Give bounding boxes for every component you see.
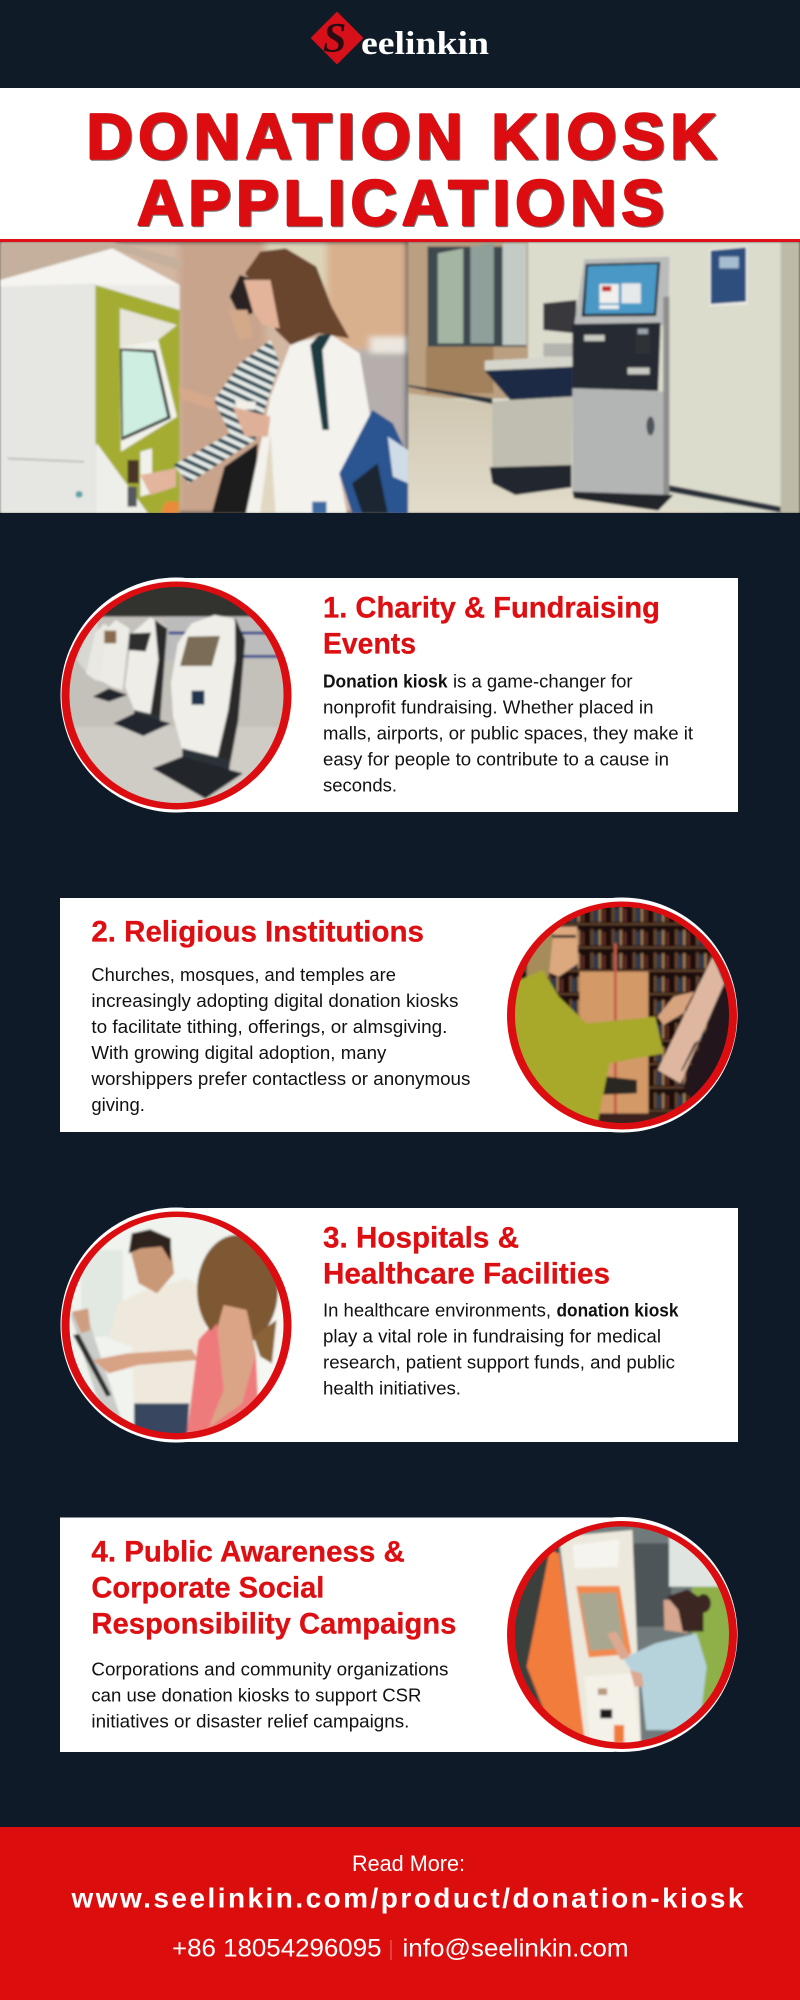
body text: is a game-changer for (453, 672, 632, 692)
heading: Responsibility Campaigns (91, 1608, 456, 1641)
contact details (172, 1935, 628, 1963)
photo banner (0, 242, 800, 513)
contact details: +86 18054296095 (172, 1935, 382, 1963)
heading: 3. Hospitals & (323, 1221, 519, 1254)
body text: giving. (91, 1095, 145, 1115)
body text: can use donation kiosks to support CSR (91, 1686, 421, 1706)
body text (90, 965, 470, 1115)
heading (323, 1221, 610, 1290)
contact details: info@seelinkin.com (402, 1935, 628, 1963)
body text: With growing digital adoption, many (91, 1043, 386, 1063)
title: APPLICATIONS (137, 167, 664, 239)
footer band (0, 1827, 800, 2000)
body text (91, 1660, 448, 1732)
heading: Corporate Social (91, 1572, 324, 1605)
website url: www.seelinkin.com/product/donation-kiosk (70, 1882, 744, 1913)
body text: play a vital role in fundraising for medical (323, 1327, 661, 1347)
body text: In healthcare environments, (323, 1301, 551, 1321)
heading: Healthcare Facilities (323, 1257, 610, 1290)
panel 2: Religious Institutions (60, 897, 743, 1133)
heading: 2. Religious Institutions (91, 916, 424, 949)
body text (323, 672, 693, 796)
body text: Donation kiosk (323, 672, 448, 692)
logo: Seelinkin: eelinkin (361, 26, 489, 62)
heading: Events (323, 627, 416, 660)
body text: initiatives or disaster relief campaigns. (91, 1712, 409, 1732)
body text: Corporations and community organizations (91, 1660, 448, 1680)
photo: women using green kiosk (0, 242, 408, 513)
panel 1: Charity & Fundraising Events (58, 577, 738, 813)
body text: to facilitate tithing, offerings, or almsgiving. (91, 1017, 447, 1037)
title band (0, 88, 800, 242)
heading (323, 591, 660, 660)
heading (91, 1536, 456, 1641)
header band with logo (0, 0, 800, 88)
logo: Seelinkin: S (323, 16, 346, 62)
body text: Churches, mosques, and temples are (91, 965, 396, 985)
body text: donation kiosk (556, 1301, 679, 1321)
circular photo 1: airport kiosks (58, 577, 297, 813)
read more label: Read More: (352, 1851, 465, 1876)
circular photo 2: woman at kiosk in library (504, 897, 743, 1133)
heading: 4. Public Awareness & (91, 1536, 405, 1569)
body text (323, 1301, 679, 1399)
heading: 1. Charity & Fundraising (323, 591, 660, 624)
photo: grey kiosk in lobby (408, 242, 800, 513)
logo: Seelinkin (312, 13, 489, 63)
title (86, 100, 716, 239)
circular photo 4: woman at orange kiosk (504, 1517, 743, 1753)
body text: health initiatives. (323, 1379, 461, 1399)
body text: easy for people to contribute to a cause in (323, 750, 669, 770)
circular photo 3: couple at kiosk (58, 1207, 297, 1443)
body text: increasingly adopting digital donation kiosks (91, 991, 458, 1011)
body text: malls, airports, or public spaces, they make it (323, 724, 693, 744)
title: DONATION KIOSK (86, 100, 716, 172)
body text: worshippers prefer contactless or anonymous (90, 1069, 470, 1089)
body text: nonprofit fundraising. Whether placed in (323, 698, 654, 718)
body text: seconds. (323, 776, 397, 796)
panel 4: Public Awareness & CSR Campaigns (60, 1517, 743, 1753)
body text: research, patient support funds, and public (323, 1353, 675, 1373)
panel 3: Hospitals & Healthcare Facilities (58, 1207, 738, 1443)
